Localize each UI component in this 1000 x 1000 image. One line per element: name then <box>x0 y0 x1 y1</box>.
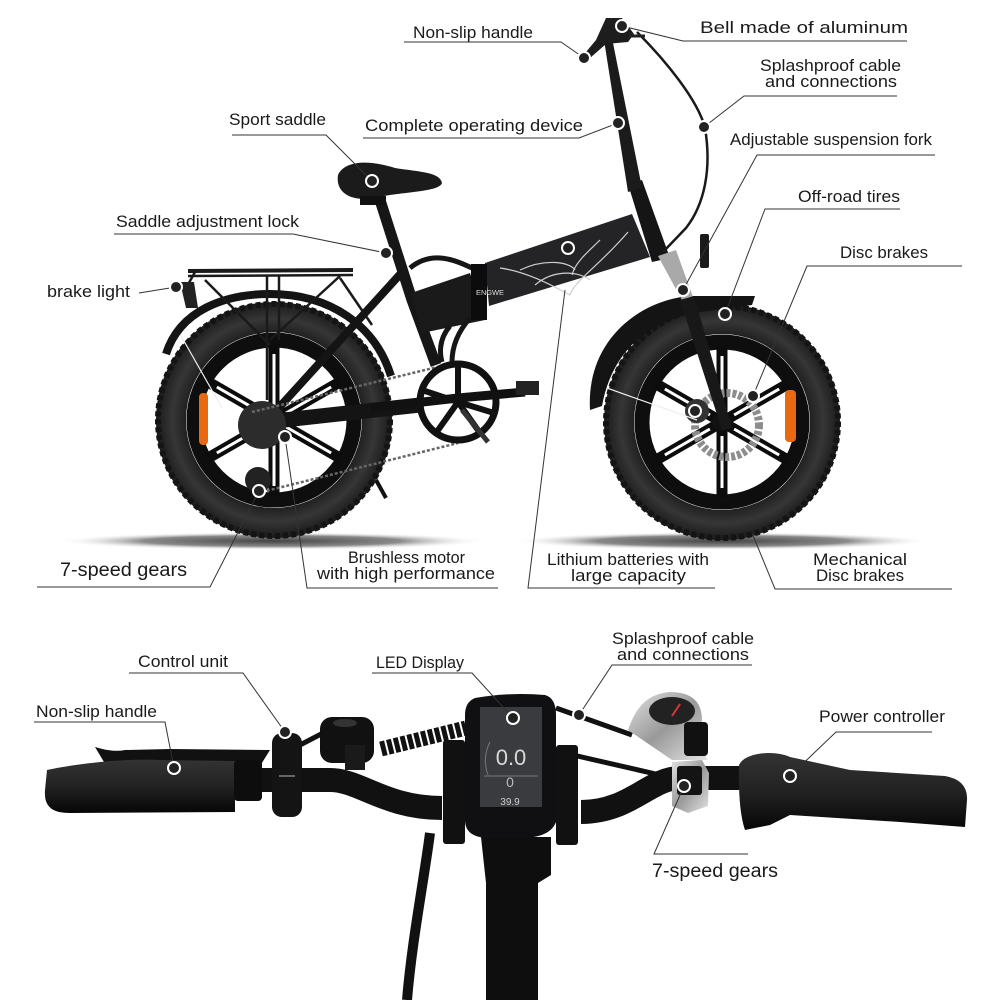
callout: off-road tires <box>719 187 900 320</box>
rear wheel <box>156 302 392 538</box>
lower frame arcs <box>440 318 470 362</box>
display clamps <box>443 740 578 845</box>
callout: non-slip handle close-up: Non-slip handle <box>36 702 157 721</box>
front fork <box>658 250 732 430</box>
front disc brake <box>685 393 759 457</box>
callout: frame graphic <box>562 242 574 254</box>
callout: brushless motor: Brushless motor <box>348 548 465 567</box>
head tube <box>628 180 670 262</box>
brake light <box>180 282 198 308</box>
callout: operating device <box>363 116 624 138</box>
callout: splashproof cable: and connections <box>765 72 897 91</box>
callout: sport saddle: Sport saddle <box>229 110 326 129</box>
callout: 7-speed gears: 7-speed gears <box>60 560 187 581</box>
callout: non-slip handle close-up <box>34 702 180 774</box>
handlebar stem <box>604 38 642 192</box>
callout: splashproof cable close-up: Splashproof cable <box>612 629 754 648</box>
front fender <box>590 296 755 410</box>
callout: suspension fork <box>677 130 935 296</box>
top tube <box>410 258 472 268</box>
callout: non-slip handle: Non-slip handle <box>413 23 533 42</box>
callout: saddle lock <box>114 212 392 259</box>
fine white cables across wheels <box>180 334 697 420</box>
battery section <box>411 273 485 333</box>
rear rack <box>185 270 372 400</box>
handlebar close-up <box>45 692 967 1000</box>
LED display: 0.0 <box>496 745 526 770</box>
handlebar top <box>586 18 645 58</box>
coiled cable <box>381 728 466 749</box>
callout: splashproof cable: Splashproof cable <box>760 56 901 75</box>
callout: disc brakes <box>747 243 962 402</box>
shifter gauge <box>628 692 708 760</box>
callout: sport saddle <box>229 110 378 187</box>
front light <box>700 234 709 268</box>
callout: lithium batteries: Lithium batteries with <box>547 550 709 569</box>
rear frame stays <box>275 270 420 420</box>
callout: splashproof cable close-up: and connections <box>617 645 749 664</box>
callout: mechanical disc brakes: Mechanical <box>813 550 907 569</box>
kickstand <box>376 480 386 498</box>
upper crossbars <box>300 708 660 775</box>
callout: 7-speed gears close-up <box>652 780 778 882</box>
main frame beam <box>485 214 650 306</box>
callout: brake light: brake light <box>47 282 130 301</box>
LED display: 0 <box>506 774 514 790</box>
callout: operating device: Complete operating device <box>365 116 583 135</box>
brake cable <box>637 32 708 252</box>
folding joint: ENGWE <box>476 290 504 297</box>
callout: bell <box>616 18 908 41</box>
spare lever <box>95 747 270 772</box>
callout: brushless motor <box>279 431 498 588</box>
callout: suspension fork: Adjustable suspension fork <box>730 130 932 149</box>
callout: non-slip handle <box>404 23 590 64</box>
LED display <box>465 694 556 838</box>
drivetrain <box>238 362 539 493</box>
handlebar tube <box>235 778 745 812</box>
callout: LED display <box>372 653 519 724</box>
callout: LED display: LED Display <box>376 653 464 672</box>
callout: mechanical disc brakes <box>689 405 952 589</box>
callout: control unit: Control unit <box>138 652 228 671</box>
seat post and seat tube <box>380 200 436 365</box>
callout: splashproof cable close-up <box>573 629 754 721</box>
bell <box>320 717 374 770</box>
right grip <box>739 753 967 830</box>
callout: lithium batteries: large capacity <box>571 566 687 585</box>
callout: 7-speed gears close-up: 7-speed gears <box>652 861 778 882</box>
control unit <box>272 733 302 817</box>
stem neck <box>481 837 551 883</box>
callout: disc brakes: Disc brakes <box>840 243 928 262</box>
callout: saddle lock: Saddle adjustment lock <box>116 212 300 231</box>
ground shadows <box>57 532 932 550</box>
callout: brake light <box>47 281 182 301</box>
hanging cable <box>407 833 430 1000</box>
folding joint <box>471 264 504 320</box>
left collar <box>234 760 262 801</box>
front wheel <box>604 304 840 540</box>
callout: mechanical disc brakes: Disc brakes <box>816 566 904 585</box>
callout: power controller <box>784 707 945 782</box>
gear shifter <box>672 760 709 813</box>
rear fender <box>166 294 391 376</box>
callout: bell: Bell made of aluminum <box>700 18 908 37</box>
saddle <box>338 163 442 205</box>
side view bike <box>156 18 840 540</box>
stem tube <box>486 880 538 1000</box>
callout: splashproof cable <box>698 56 901 133</box>
left grip <box>45 760 235 813</box>
callout: control unit <box>129 652 291 738</box>
callout: brushless motor: with high performance <box>316 564 495 583</box>
callout: lithium batteries <box>528 290 715 588</box>
callout: off-road tires: Off-road tires <box>798 187 900 206</box>
callout: 7-speed gears <box>37 485 265 587</box>
callout: power controller: Power controller <box>819 707 945 726</box>
LED display: 39.9 <box>500 797 520 808</box>
